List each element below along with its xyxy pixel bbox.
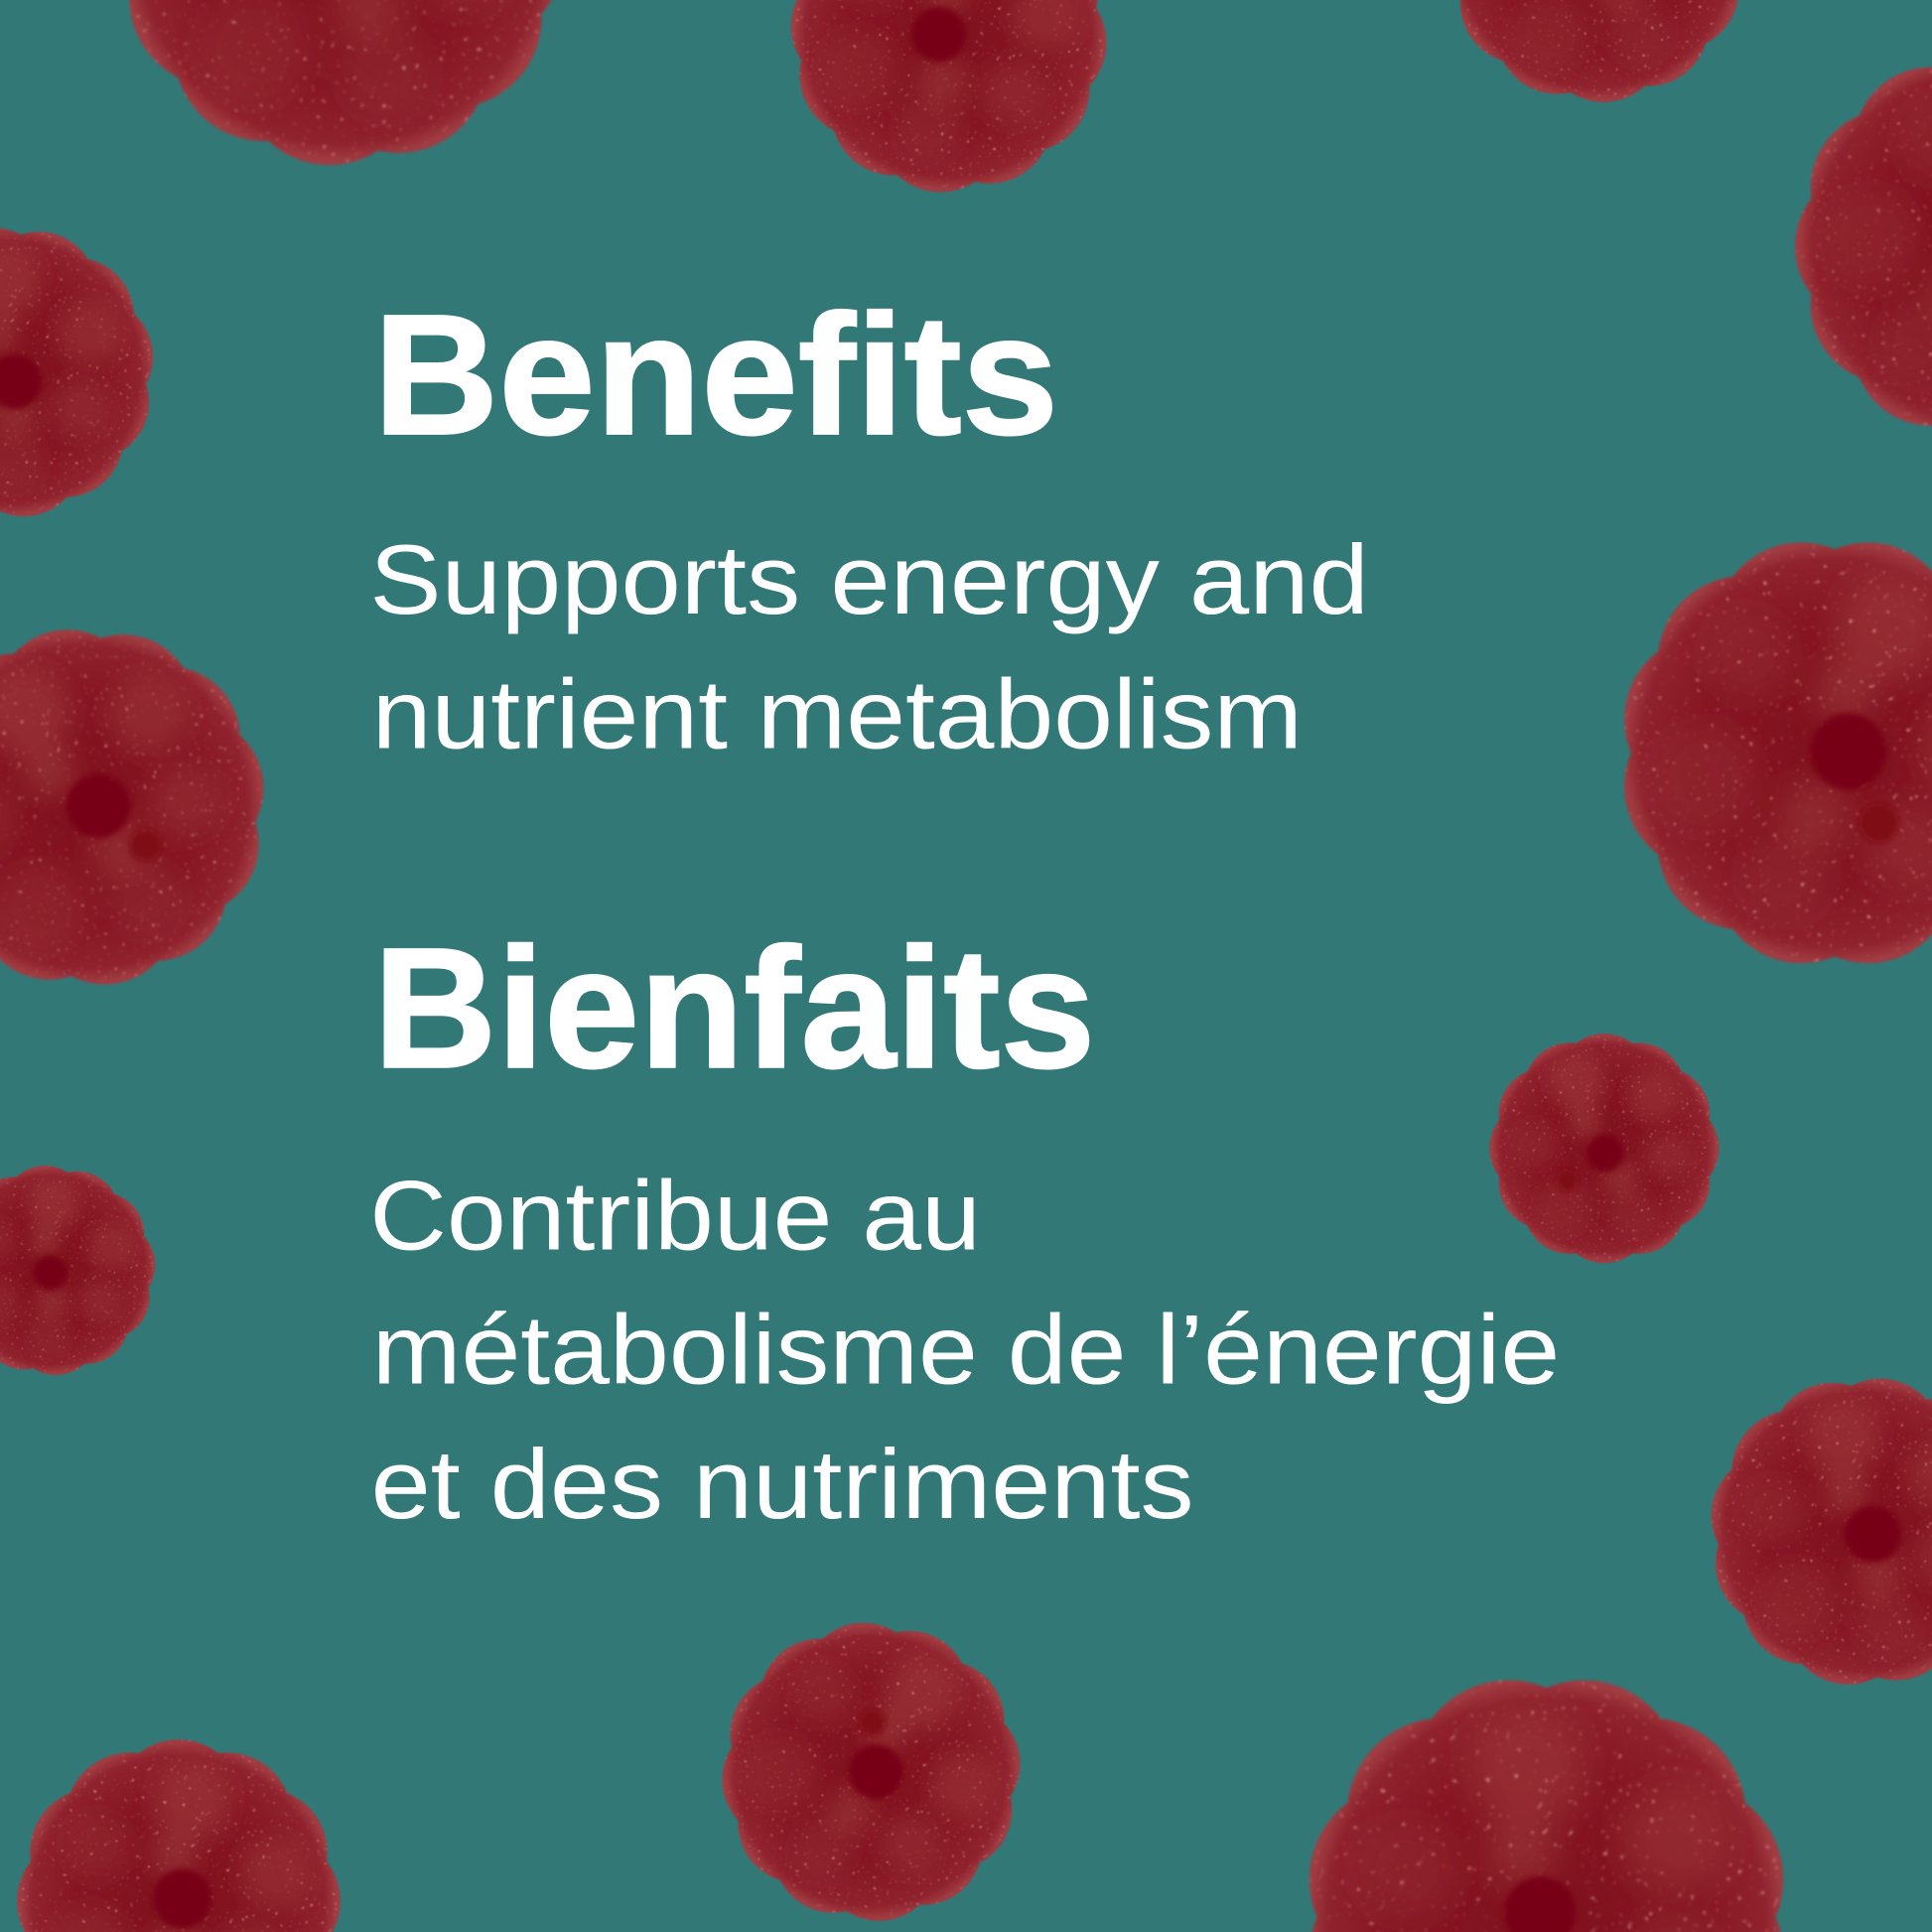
text block: French benefit: Contribue au [369,1161,981,1271]
gummy: top middle [731,0,1167,252]
gummy: left small [0,1126,196,1415]
gummy: right top [1756,12,1932,481]
heading: Benefits: Benefits [373,279,1058,471]
gummy: right lower [1663,1330,1932,1732]
text block: English benefit [369,525,1369,769]
heading: Bienfaits: Bienfaits [373,912,1095,1104]
gummy: bottom right [1222,1593,1870,1932]
gummy: bottom left [0,1677,403,1932]
text block: French benefit: métabolisme de l’énergie [372,1296,1560,1406]
text block: French benefit [369,1161,1560,1540]
gummy: right small [1466,1011,1742,1286]
gummy: left upper [0,174,207,571]
text block: English benefit: nutrient metabolism [372,659,1303,769]
gummy: right middle [1547,466,1932,1040]
gummy: left middle [0,618,276,997]
text block: English benefit: Supports energy and [369,525,1369,635]
gummy: top right [1424,0,1768,123]
gummy: bottom middle [684,1585,1058,1932]
text block: French benefit: et des nutriments [371,1430,1194,1540]
gummy: top left [60,0,623,223]
